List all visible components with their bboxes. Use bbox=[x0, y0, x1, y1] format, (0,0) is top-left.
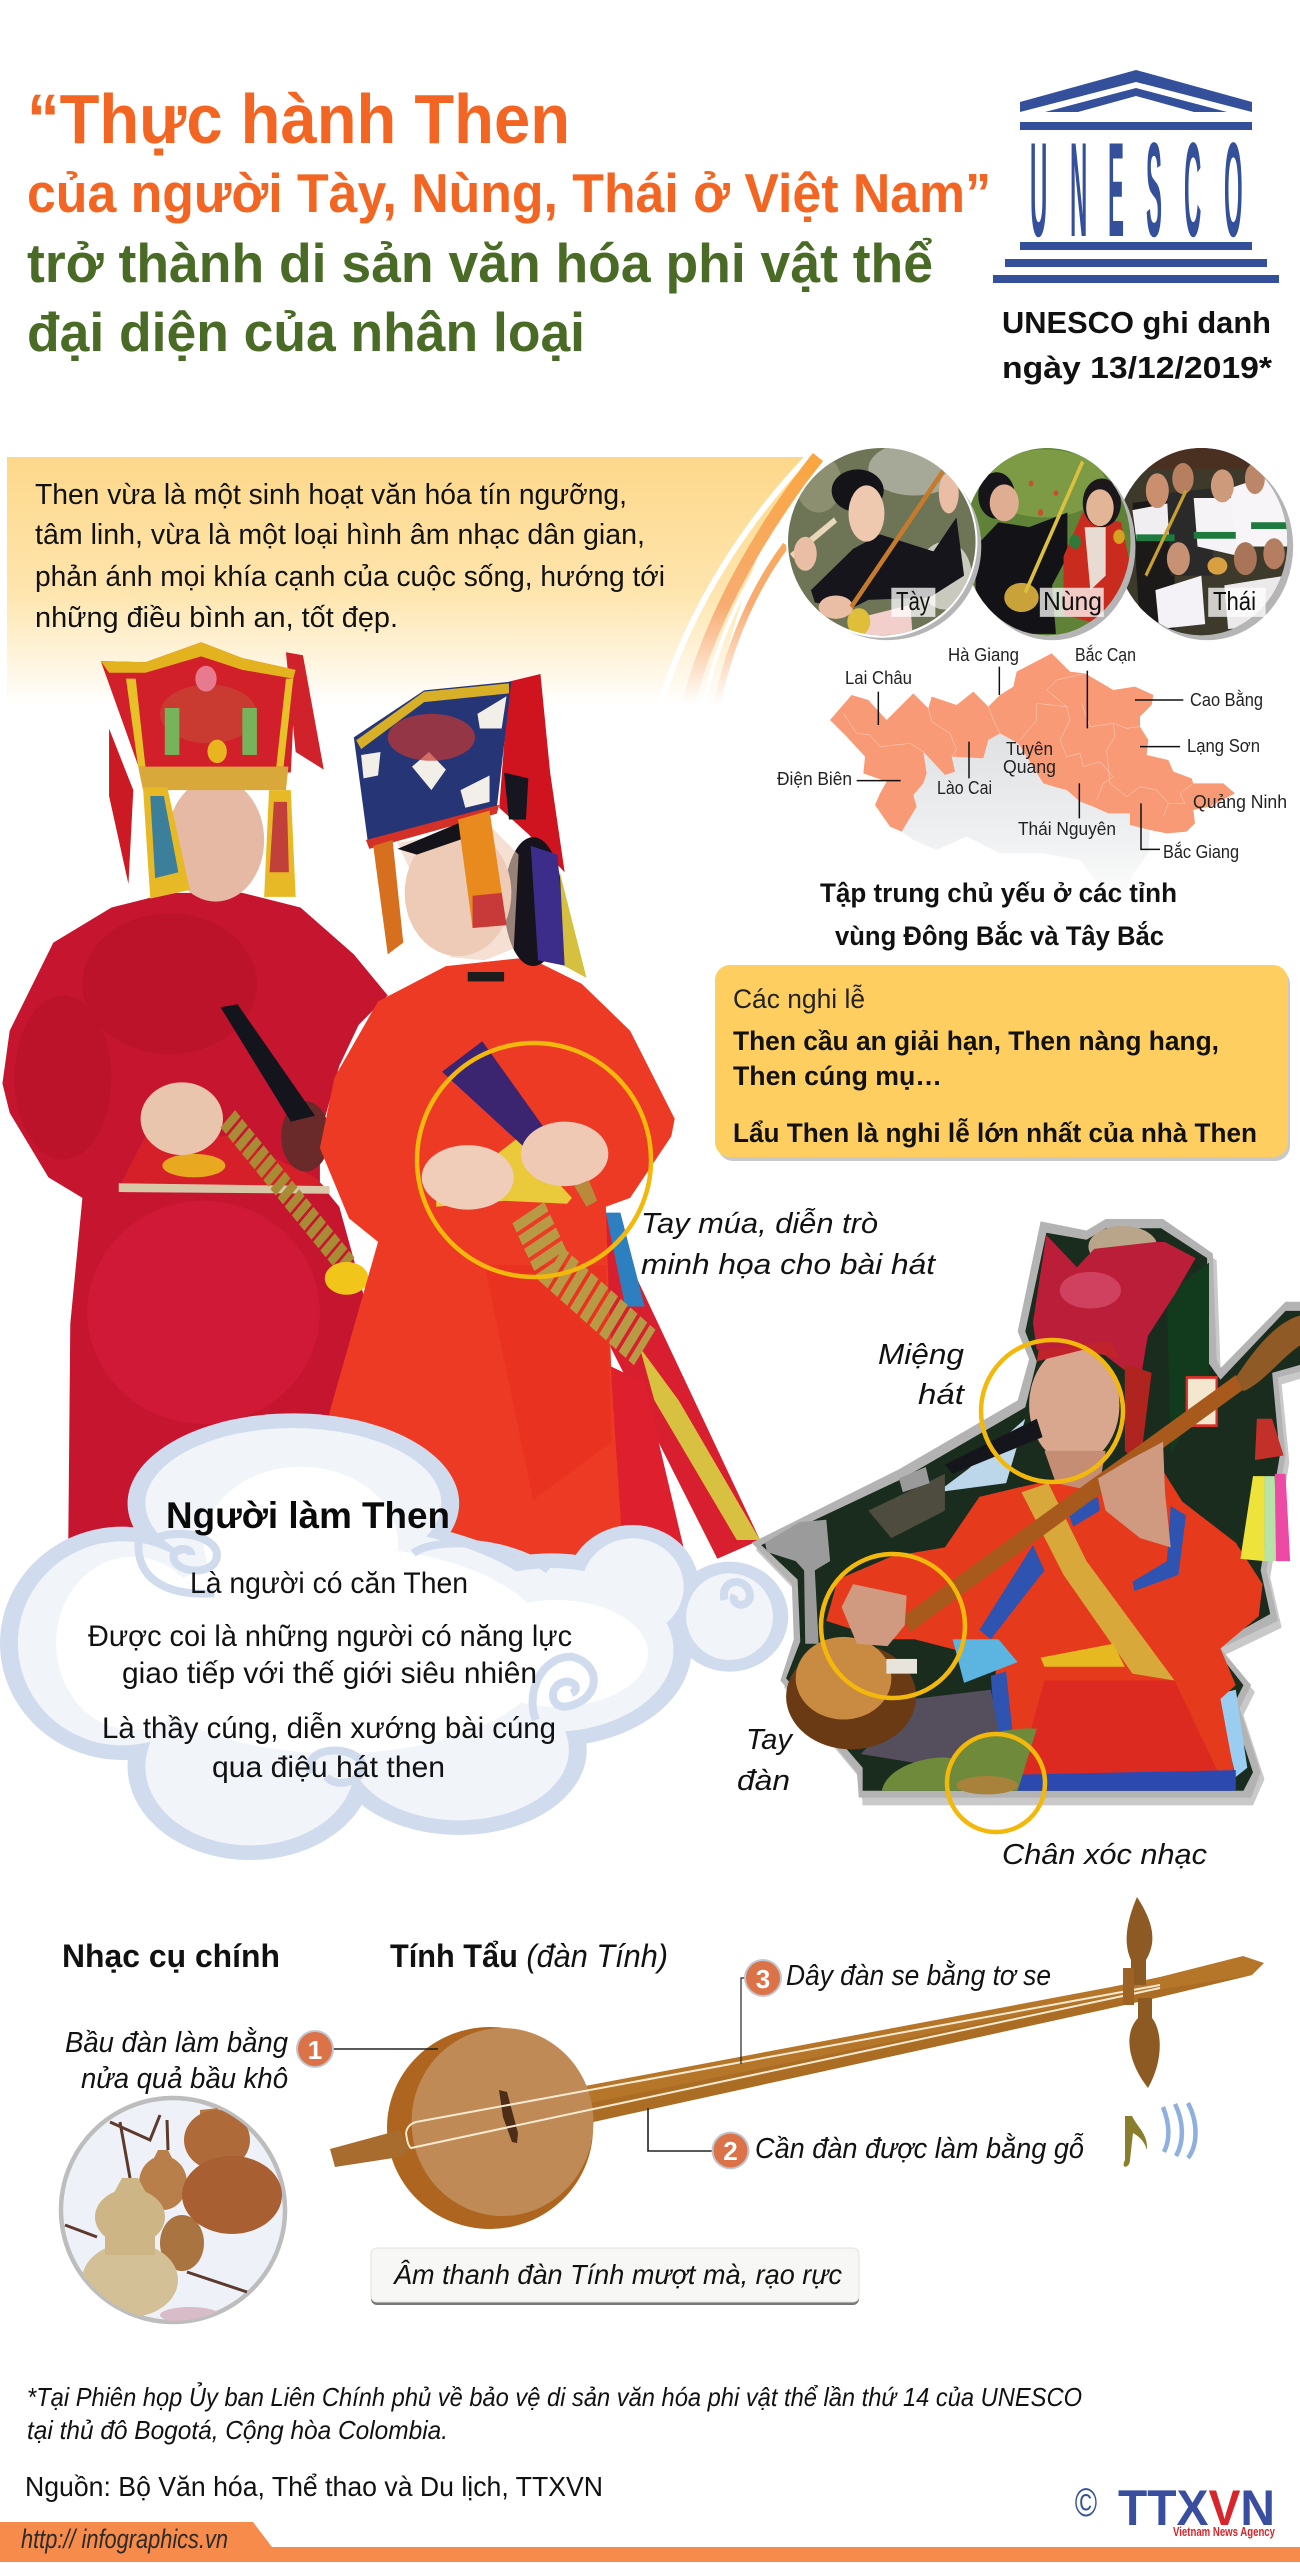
cloud body text: Là người có căn Then bbox=[190, 1567, 468, 1600]
strings bbox=[406, 1985, 1160, 2148]
map caption: Tập trung chủ yếu ở các tỉnh bbox=[820, 878, 1177, 908]
panel: rituals: Lẩu Then là nghi lễ lớn nhất của nhà Then bbox=[733, 1117, 1257, 1148]
cloud body text: Là thầy cúng, diễn xướng bài cúng bbox=[102, 1712, 556, 1745]
labels on musician: Miệng bbox=[878, 1339, 964, 1371]
map province names: Quảng Ninh bbox=[1193, 792, 1287, 812]
labels on musician: Tay bbox=[746, 1724, 794, 1756]
label: Nùng bbox=[1040, 588, 1104, 617]
tassel bbox=[1240, 1419, 1290, 1561]
TTXVN logo: TTXVN bbox=[1118, 2480, 1275, 2536]
intro text: tâm linh, vừa là một loại hình âm nhạc dân gian, bbox=[35, 519, 645, 551]
badge 3: 3 bbox=[756, 1964, 770, 1994]
callout: sound description bbox=[371, 2248, 859, 2305]
callout 1 line bbox=[332, 2048, 438, 2050]
photo labels: Nùng bbox=[1043, 586, 1102, 616]
footnote: *Tại Phiên họp Ủy ban Liên Chính phủ về bảo vệ di sản văn hóa phi vật thể lần thứ 14 của UNESCO bbox=[27, 2381, 1082, 2412]
UNESCO date note: ngày 13/12/2019* bbox=[1002, 350, 1273, 385]
UNESCO date note bbox=[1002, 305, 1273, 385]
title line 4: đại diện của nhân loại bbox=[27, 301, 585, 363]
map province names bbox=[777, 644, 1287, 862]
footer bar bbox=[0, 2522, 1300, 2562]
label: Tày bbox=[891, 588, 935, 617]
label: dancing hands bbox=[641, 1207, 937, 1281]
musician robe bbox=[826, 1465, 1263, 1791]
footnote: tại thủ đô Bogotá, Cộng hòa Colombia. bbox=[27, 2415, 448, 2445]
photo: gourds bbox=[61, 2098, 285, 2323]
footnote bbox=[27, 2381, 1082, 2445]
map caption bbox=[820, 878, 1177, 951]
green trousers and bells bbox=[882, 1728, 1037, 1794]
map: other provinces bbox=[902, 733, 1150, 907]
title line 3: trở thành di sản văn hóa phi vật thể bbox=[27, 232, 933, 294]
intro text bbox=[35, 479, 665, 634]
tuning pegs bbox=[1123, 1897, 1160, 2088]
map province names: Quang bbox=[1003, 757, 1056, 777]
footer bar: http:// infographics.vn bbox=[21, 2524, 228, 2554]
map province names: Lạng Sơn bbox=[1187, 736, 1260, 756]
source: Nguồn: Bộ Văn hóa, Thể thao và Du lịch, TTXVN bbox=[25, 2471, 603, 2502]
gourd body bbox=[387, 2027, 593, 2229]
photo: Thái bbox=[1115, 445, 1293, 640]
title bbox=[27, 80, 991, 363]
callout: sound description: Âm thanh đàn Tính mượt mà, rạo rực bbox=[392, 2259, 842, 2290]
badge 2 bbox=[712, 2132, 750, 2170]
intro text: những điều bình an, tốt đẹp. bbox=[35, 602, 398, 634]
map province names: Thái Nguyên bbox=[1018, 819, 1116, 839]
tail bbox=[330, 2130, 408, 2167]
panel: cloud bbox=[0, 1413, 788, 1860]
hands bbox=[842, 1442, 1171, 1646]
map province names: Cao Bằng bbox=[1190, 689, 1263, 710]
map province names: Lào Cai bbox=[937, 778, 992, 798]
label: dancing hands: Tay múa, diễn trò bbox=[641, 1207, 878, 1240]
callout text bbox=[65, 1959, 1084, 2165]
UNESCO logo: UNESCO bbox=[1030, 116, 1243, 265]
map caption: vùng Đông Bắc và Tây Bắc bbox=[835, 920, 1164, 951]
photo: Nùng bbox=[960, 445, 1136, 640]
musician hat bbox=[1033, 1226, 1196, 1465]
map province names: Hà Giang bbox=[948, 645, 1019, 665]
panel: rituals bbox=[715, 965, 1290, 1161]
callout 2 line bbox=[648, 2108, 713, 2151]
man in dark red robe bbox=[2, 642, 388, 1588]
sound waves bbox=[1163, 2103, 1196, 2158]
panel: rituals: Then cúng mụ… bbox=[733, 1061, 942, 1091]
map province names: Điện Biên bbox=[777, 769, 852, 789]
callout 3 line bbox=[741, 1978, 750, 2064]
sound hole bbox=[499, 2090, 518, 2143]
title line 2: của người Tày, Nùng, Thái ở Việt Nam” bbox=[27, 162, 991, 224]
cloud heading: Người làm Then bbox=[166, 1495, 450, 1536]
cloud body text: giao tiếp với thế giới siêu nhiên bbox=[122, 1657, 537, 1690]
callouts for instrument parts bbox=[65, 1959, 1084, 2170]
badge 1: 1 bbox=[308, 2035, 322, 2065]
labels on musician: Chân xóc nhạc bbox=[1002, 1839, 1208, 1871]
UNESCO date note: UNESCO ghi danh bbox=[1002, 305, 1271, 340]
map province names: Lai Châu bbox=[845, 668, 912, 688]
labels on musician bbox=[737, 1339, 1208, 1871]
highlight circle: dancing hands bbox=[417, 1043, 651, 1277]
instrument: dan tinh illustration bbox=[330, 1897, 1264, 2229]
panel: intro background with swoosh bbox=[7, 457, 818, 705]
callout text: Cần đàn được làm bằng gỗ bbox=[755, 2132, 1084, 2165]
badge 2: 2 bbox=[723, 2136, 738, 2166]
callout text: Dây đàn se bằng tơ se bbox=[786, 1959, 1051, 1992]
map of northern Vietnam bbox=[777, 644, 1287, 907]
cloud body text bbox=[88, 1567, 572, 1784]
UNESCO logo bbox=[993, 70, 1279, 283]
cloud body text: Được coi là những người có năng lực bbox=[88, 1620, 572, 1653]
heading: main instruments: Nhạc cụ chính bbox=[62, 1938, 280, 1974]
photo: Tày bbox=[786, 442, 981, 640]
badge 3 bbox=[744, 1959, 782, 1997]
panel: rituals: Then cầu an giải hạn, Then nàng hang, bbox=[733, 1026, 1219, 1056]
callout text: Bầu đàn làm bằng bbox=[65, 2026, 288, 2059]
heading: Tinh Tau: Tính Tẩu (đàn Tính) bbox=[390, 1938, 668, 1974]
intro text: Then vừa là một sinh hoạt văn hóa tín ngưỡng, bbox=[35, 479, 627, 511]
icon: music note with sound waves bbox=[1124, 2103, 1196, 2167]
woman in orange-red robe bbox=[315, 674, 760, 1588]
map province names: Bắc Cạn bbox=[1075, 644, 1136, 665]
red card bbox=[1187, 1377, 1217, 1426]
badge 1 bbox=[296, 2030, 334, 2068]
labels on musician: hát bbox=[918, 1379, 966, 1411]
music note bbox=[1124, 2116, 1147, 2167]
panel: rituals: Các nghi lễ bbox=[733, 983, 865, 1014]
instrument: dan tinh bbox=[786, 1315, 1300, 1749]
neck bbox=[585, 1956, 1264, 2122]
label: dancing hands: minh họa cho bài hát bbox=[641, 1249, 937, 1281]
label: Thái bbox=[1208, 588, 1266, 617]
title line 1: “Thực hành Then bbox=[27, 80, 570, 158]
photo labels: Thái bbox=[1213, 586, 1256, 616]
ethnic group photo circles bbox=[786, 442, 1293, 640]
cloud body text: qua điệu hát then bbox=[212, 1751, 445, 1784]
photo: two Then practitioners bbox=[2, 642, 760, 1588]
photo: musician singing and playing bbox=[752, 1219, 1300, 1805]
intro text: phản ánh mọi khía cạnh của cuộc sống, hướng tới bbox=[35, 561, 665, 593]
microphone and stand bbox=[765, 1419, 1043, 1644]
callout text: nửa quả bầu khô bbox=[81, 2063, 288, 2095]
map province names: Bắc Giang bbox=[1163, 841, 1239, 862]
photo labels: Tày bbox=[896, 586, 930, 616]
photo labels bbox=[896, 586, 1256, 616]
TTXVN logo: © bbox=[1075, 2480, 1097, 2525]
map: highlighted provinces bbox=[830, 653, 1235, 833]
labels on musician: đàn bbox=[737, 1765, 790, 1797]
highlight circles on musician bbox=[821, 1340, 1123, 1832]
map province names: Tuyên bbox=[1006, 739, 1053, 759]
